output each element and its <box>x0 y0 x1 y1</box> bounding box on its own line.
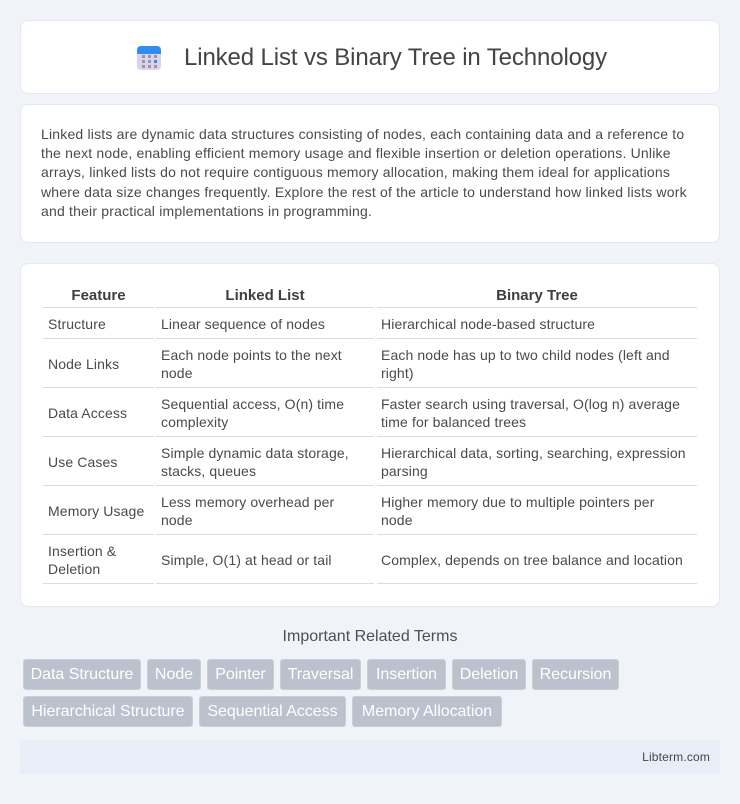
text block: intro paragraph <box>41 126 687 219</box>
row: data access: complexity <box>161 414 228 430</box>
row: node links: Each node points to the next <box>161 347 342 363</box>
panel: title card <box>20 20 720 94</box>
row: use cases <box>48 445 686 479</box>
row: insertion and deletion: Complex, depends on tree balance and location <box>381 552 683 568</box>
row: data access <box>48 396 680 430</box>
row: use cases: Simple dynamic data storage, <box>161 445 349 461</box>
text block: intro paragraph: the next node, enabling efficient memory usage and flexible insertion or deletion operations. Unlike <box>41 145 671 161</box>
footer bar <box>20 740 720 774</box>
row: insertion and deletion: Simple, O(1) at head or tail <box>161 552 332 568</box>
related term tags: Pointer <box>215 666 266 683</box>
row: memory usage <box>48 494 654 528</box>
related term tags: Memory Allocation <box>362 703 492 720</box>
related term tags: Node <box>155 666 193 683</box>
row: use cases: parsing <box>381 463 428 479</box>
row: use cases: stacks, queues <box>161 463 256 479</box>
row: structure: Structure <box>48 316 106 332</box>
text block: intro paragraph: Linked lists are dynamic data structures consisting of nodes, each containing data and a reference to <box>41 126 684 142</box>
row: memory usage: Less memory overhead per <box>161 494 334 510</box>
related term tags: Traversal <box>288 666 353 683</box>
row: memory usage: node <box>381 512 413 528</box>
row: node links: Each node has up to two child nodes (left and <box>381 347 670 363</box>
title: Linked List vs Binary Tree in Technology <box>184 44 607 71</box>
related term tags: Recursion <box>540 666 611 683</box>
row: data access: Data Access <box>48 405 127 421</box>
table header: Feature <box>71 287 126 304</box>
row: data access: Sequential access, O(n) time <box>161 396 344 412</box>
related term tags: Data Structure <box>31 666 133 683</box>
row: insertion and deletion <box>48 543 683 577</box>
row: memory usage: Memory Usage <box>48 503 144 519</box>
heading: important related terms: Important Related Terms <box>283 628 457 645</box>
text block: intro paragraph: and their practical implementations in programming. <box>41 203 372 219</box>
panel: intro card <box>20 104 720 243</box>
table header <box>71 287 578 304</box>
related term tags: Hierarchical Structure <box>31 703 185 720</box>
row: memory usage: node <box>161 512 193 528</box>
row: use cases: Use Cases <box>48 454 118 470</box>
row: node links: Node Links <box>48 356 119 372</box>
row: node links: right) <box>381 365 414 381</box>
panel: comparison table card <box>20 263 720 607</box>
text block: intro paragraph: where data size changes frequently. Explore the rest of the article to understand how linked lists work <box>41 184 687 200</box>
row: memory usage: Higher memory due to multiple pointers per <box>381 494 654 510</box>
row: insertion and deletion: Deletion <box>48 561 100 577</box>
related term tags: Insertion <box>376 666 437 683</box>
related term tags: Sequential Access <box>207 703 338 720</box>
table header: Linked List <box>225 287 305 304</box>
row: structure: Hierarchical node-based structure <box>381 316 595 332</box>
row: structure <box>48 316 595 332</box>
footer source label: Libterm.com <box>642 750 710 764</box>
row: insertion and deletion: Insertion & <box>48 543 116 559</box>
related term tags: Deletion <box>460 666 518 683</box>
row: node links <box>48 347 670 381</box>
icon: calendar grid <box>137 46 161 70</box>
row: use cases: Hierarchical data, sorting, searching, expression <box>381 445 686 461</box>
row: node links: node <box>161 365 193 381</box>
row: data access: time for balanced trees <box>381 414 526 430</box>
table header: Binary Tree <box>496 287 578 304</box>
row: data access: Faster search using traversal, O(log n) average <box>381 396 680 412</box>
text block: intro paragraph: arrays, linked lists do not require contiguous memory allocation, making them ideal for applications <box>41 164 670 180</box>
row: structure: Linear sequence of nodes <box>161 316 325 332</box>
